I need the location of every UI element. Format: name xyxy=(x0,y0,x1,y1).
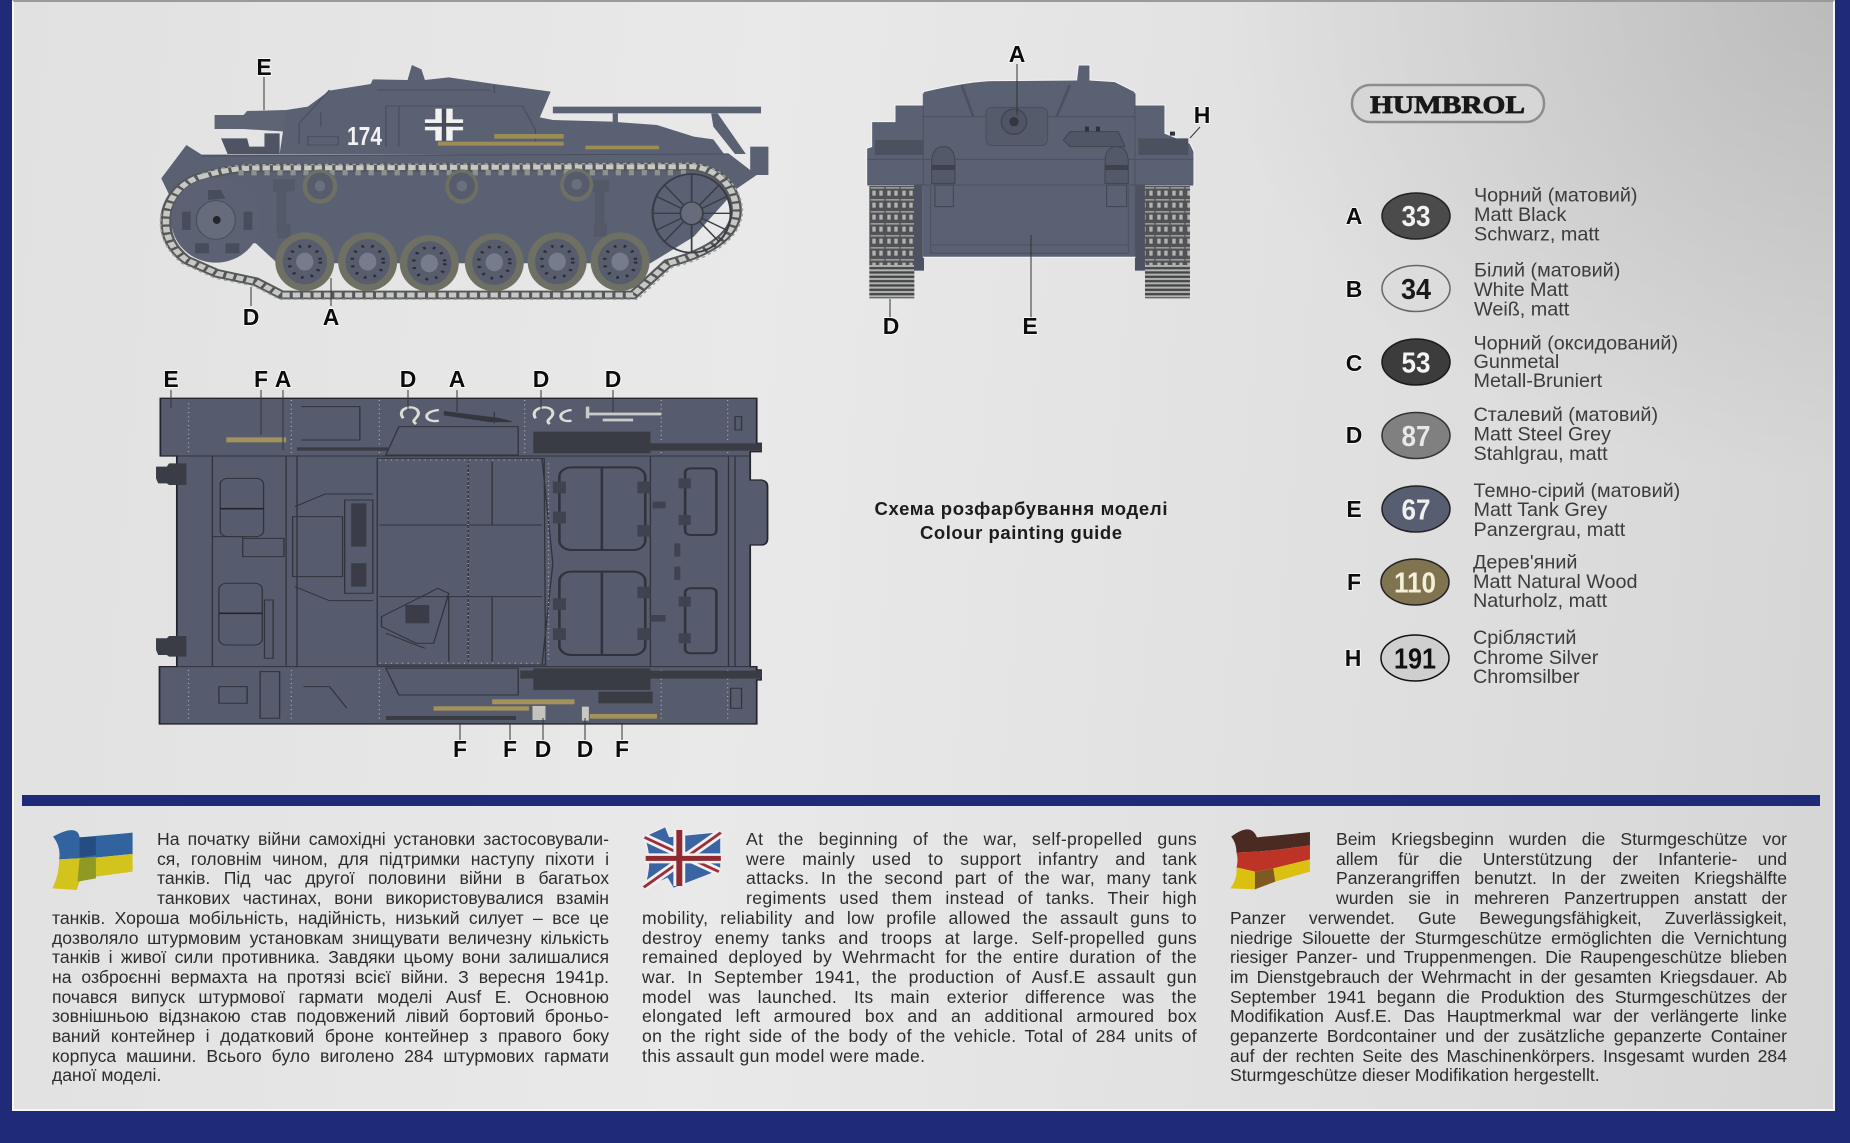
English text block: regiments used them instead of tanks. Their high xyxy=(746,888,1197,908)
top view callouts: D xyxy=(533,366,549,392)
Humbrol logo: HUMBROL xyxy=(1370,92,1525,119)
hull plan silhouette xyxy=(159,398,768,724)
legend row E: 67: Panzergrau, matt xyxy=(1474,519,1626,541)
English text block: war. In September 1941, the production of Ausf.E assault gun xyxy=(642,967,1197,987)
top view callouts: F xyxy=(503,736,517,762)
legend row C: 53: C xyxy=(1346,350,1362,376)
hull front silhouette xyxy=(867,65,1194,257)
flag: Ukraine xyxy=(52,830,133,890)
German text block: niedrige Silouette der Sturmgeschütze ermöglichten die Vernichtung xyxy=(1230,928,1787,948)
top view of the vehicle xyxy=(156,398,768,724)
legend row F: 110: Naturholz, matt xyxy=(1473,590,1608,612)
Ukrainian text block: дозволяло штурмовим установкам знищувати величезну кількість xyxy=(52,928,609,948)
legend row F: 110: F xyxy=(1347,569,1361,595)
stowed wood logs xyxy=(438,134,659,149)
top view callouts: D xyxy=(605,366,621,392)
silver fittings, colour H xyxy=(1085,127,1175,136)
English text block: this assault gun model were made. xyxy=(642,1046,925,1066)
legend row A: 33 xyxy=(1346,184,1638,246)
legend row E: 67: Темно-сірий (матовий) xyxy=(1474,480,1680,502)
side view callouts: E xyxy=(256,54,272,80)
German text block: Beim Kriegsbeginn wurden die Sturmgeschütze vor xyxy=(1336,829,1787,849)
English text block xyxy=(642,829,1197,1066)
top view callouts: F xyxy=(615,736,629,762)
Ukrainian text block: ся, головнім чином, для підтримки наступу піхоти і xyxy=(157,849,609,869)
German text block xyxy=(1230,829,1787,1085)
suspension arms xyxy=(273,179,609,238)
top view callouts: F xyxy=(453,736,467,762)
English text block: remained deployed by Wehrmacht for the entire duration of the xyxy=(642,947,1197,967)
Ukrainian text block: танків. Хороша мобільність, надійність, низький силует – все це xyxy=(52,908,609,928)
lower hull xyxy=(161,145,757,263)
track teeth along the top run xyxy=(238,165,694,181)
top view callouts: A xyxy=(275,366,291,392)
Ukrainian text block: ваний контейнер і додатковий броне контейнер з правого боку xyxy=(52,1026,609,1046)
top view callouts: D xyxy=(535,736,551,762)
German text block: Sturmgeschütze dieser Modifikation hergestellt. xyxy=(1230,1065,1600,1085)
German text block: Panzerangriffen benutzt. In der zweiten Kriegshälfte xyxy=(1336,868,1787,888)
legend row H: 191: Сріблястий xyxy=(1473,627,1576,649)
German text block: September 1941 begann die Produktion des Sturmgeschützes der xyxy=(1230,987,1787,1007)
English text block: were mainly used to support infantry and tank xyxy=(746,849,1197,869)
exhaust and rods xyxy=(297,432,761,720)
German text block: Panzer verwendet. Gute Bewegungsfähigkeit, Zuverlässigkeit, xyxy=(1230,908,1787,928)
caption: colour painting guide: Схема розфарбування моделі xyxy=(874,498,1168,519)
fender shadow line xyxy=(202,154,729,156)
rear side fittings xyxy=(219,417,742,718)
legend row C: 53: Чорний (оксидований) xyxy=(1474,332,1678,354)
headlight guards xyxy=(932,147,1128,207)
Ukrainian text block: танків і живої сили противника. Завдяки цьому вони залишалися xyxy=(52,947,609,967)
gun mount xyxy=(293,494,449,648)
German text block: allem für die Unterstützung der Infanterie- und xyxy=(1336,849,1787,869)
Ukrainian text block: почався випуск штурмової гармати моделі Ausf E. Основною xyxy=(52,987,609,1007)
German text block: im Dienstgebrauch der Wehrmacht in der gesamten Kriegsdauer. Ab xyxy=(1230,967,1787,987)
driver visor xyxy=(1063,132,1125,147)
top view callouts: D xyxy=(400,366,416,392)
steel plate, colour D xyxy=(532,706,545,720)
armour box detail xyxy=(386,106,536,147)
wooden logs, colour F xyxy=(226,437,657,719)
tracks xyxy=(869,186,1190,298)
suspension sides xyxy=(914,185,1145,271)
structural lines xyxy=(177,456,750,667)
front view callouts: E xyxy=(1022,313,1038,339)
side storage boxes xyxy=(301,407,518,695)
side view callouts: D xyxy=(243,304,259,330)
colour legend xyxy=(1345,184,1680,688)
rivet rows xyxy=(189,400,728,720)
legend row E: 67: Matt Tank Grey xyxy=(1474,499,1607,521)
front view callouts: D xyxy=(883,313,899,339)
legend row F: 110 xyxy=(1347,552,1638,612)
legend row A: 33: Matt Black xyxy=(1474,204,1566,226)
caption: colour painting guide: Colour painting guide xyxy=(920,522,1122,543)
front view callouts: H xyxy=(1194,102,1210,128)
top view callouts: D xyxy=(577,736,593,762)
side armour lines xyxy=(299,85,494,145)
legend row E: 67: 67 xyxy=(1402,494,1430,526)
Ukrainian text block: танків. Під час другої половини війни в багатьох xyxy=(157,868,609,888)
German text block: wurden sie in mehreren Panzertruppen anstatt der xyxy=(1336,888,1787,908)
English text block: on the right side of the body of the vehicle. Total of 284 units of xyxy=(642,1026,1197,1046)
caption: colour painting guide xyxy=(874,498,1168,543)
blue divider bar xyxy=(22,795,1820,806)
legend row A: 33: Чорний (матовий) xyxy=(1474,184,1638,206)
return rollers xyxy=(303,168,593,204)
side stowage boxes xyxy=(875,138,1188,155)
legend row F: 110: 110 xyxy=(1394,568,1436,600)
legend row H: 191: Chromsilber xyxy=(1473,666,1580,688)
German text block: Modifikation Ausf.E. Das Hauptmerkmal war der verlängerte linke xyxy=(1230,1006,1787,1026)
superstructure xyxy=(280,65,724,154)
Ukrainian text block: на озброєнні вермахта на протязі всієї війни. З вересня 1941р. xyxy=(52,967,609,987)
legend row B: 34: B xyxy=(1346,276,1362,302)
legend row F: 110: Дерев'яний xyxy=(1473,552,1577,574)
towing hooks xyxy=(156,463,186,657)
legend row B: 34: 34 xyxy=(1401,274,1431,306)
top view callouts: A xyxy=(449,366,465,392)
flag: United Kingdom xyxy=(644,827,721,888)
front view callouts: A xyxy=(1009,41,1025,67)
top view callouts: F xyxy=(254,366,268,392)
steel bolt, colour D xyxy=(582,707,589,721)
rear idler wheel xyxy=(653,174,731,253)
steel tow cables, colour D xyxy=(401,407,572,424)
English text block: model was launched. Its main exterior difference was the xyxy=(642,987,1197,1007)
track xyxy=(161,163,742,299)
legend row C: 53: Metall-Bruniert xyxy=(1474,370,1603,392)
legend row E: 67 xyxy=(1346,480,1680,541)
English text block: mobility, reliability and low profile allowed the assault guns to xyxy=(642,908,1197,928)
rear rack xyxy=(553,107,768,175)
front deck hatches xyxy=(212,478,284,658)
German text block: auf der rechten Seite des Maschinenkörpers. Insgesamt wurden 284 xyxy=(1230,1046,1787,1066)
legend row E: 67: E xyxy=(1346,496,1362,522)
legend row D: 87: Matt Steel Grey xyxy=(1474,424,1611,446)
vehicle number 174: 174 xyxy=(347,121,382,151)
gun barrel and mantlet xyxy=(215,110,286,132)
lines and panels xyxy=(867,93,1193,257)
legend row B: 34: Weiß, matt xyxy=(1474,298,1570,320)
side view of the vehicle xyxy=(161,65,768,299)
side view callouts xyxy=(243,54,339,330)
English text block: destroy enemy tanks and troops at large. Self-propelled guns xyxy=(642,928,1197,948)
legend row C: 53: 53 xyxy=(1402,348,1430,380)
English text block: At the beginning of the war, self-propelled guns xyxy=(746,829,1197,849)
legend row H: 191: 191 xyxy=(1394,644,1436,676)
legend row D: 87: 87 xyxy=(1402,421,1430,453)
legend row F: 110: Matt Natural Wood xyxy=(1473,571,1638,593)
English text block: elongated left armoured box and an additional armoured box xyxy=(642,1006,1197,1026)
drive sprocket xyxy=(171,177,261,263)
Ukrainian text block: зовнішньою відзнакою став подовжений лівий бортовий броньо- xyxy=(52,1006,609,1026)
side view callouts: A xyxy=(323,304,339,330)
front view callouts xyxy=(883,41,1210,339)
legend row A: 33: A xyxy=(1346,203,1362,229)
cross marking xyxy=(425,109,463,141)
legend row A: 33: 33 xyxy=(1402,201,1430,233)
English text block: attacks. In the second part of the war, many tank xyxy=(746,868,1197,888)
Ukrainian text block: На початку війни самохідні установки застосовували- xyxy=(157,829,609,849)
rear deck hatches xyxy=(553,467,716,655)
German text block: gepanzerte Bordcontainer und der zusätzliche gepanzerte Container xyxy=(1230,1026,1787,1046)
gun mantlet xyxy=(986,107,1048,146)
legend row C: 53: Gunmetal xyxy=(1474,351,1559,373)
legend row D: 87: D xyxy=(1346,422,1362,448)
legend row H: 191: H xyxy=(1345,645,1361,671)
Ukrainian text block: корпуса машини. Всього було виголено 284 штурмових гармати xyxy=(52,1046,609,1066)
steel tool, colour D xyxy=(588,407,661,420)
flag: Germany xyxy=(1230,829,1310,889)
front view of the vehicle xyxy=(867,65,1194,298)
dark fittings, colour A xyxy=(444,412,512,423)
Ukrainian text block: танкових частинах, вони використовувалися взамін xyxy=(157,888,609,908)
legend row B: 34: Білий (матовий) xyxy=(1474,260,1620,282)
legend row B: 34: White Matt xyxy=(1474,279,1569,301)
legend row D: 87 xyxy=(1346,404,1658,465)
Ukrainian text block xyxy=(52,829,609,1085)
top view callouts: E xyxy=(163,366,179,392)
German text block: riesiger Panzer- und Truppenmengen. Die Raupengeschütze blieben xyxy=(1230,947,1787,967)
top view callouts xyxy=(163,366,629,762)
legend row H: 191: Chrome Silver xyxy=(1473,647,1599,669)
legend row H: 191 xyxy=(1345,627,1599,688)
legend row D: 87: Stahlgrau, matt xyxy=(1474,443,1608,465)
legend row A: 33: Schwarz, matt xyxy=(1474,224,1600,246)
legend row D: 87: Сталевий (матовий) xyxy=(1474,404,1658,426)
legend row C: 53 xyxy=(1346,332,1678,392)
Humbrol logo xyxy=(1352,85,1544,122)
front fittings xyxy=(221,133,280,154)
Ukrainian text block: даної моделі. xyxy=(52,1065,161,1085)
road wheels xyxy=(275,232,650,292)
legend row B: 34 xyxy=(1346,260,1620,320)
